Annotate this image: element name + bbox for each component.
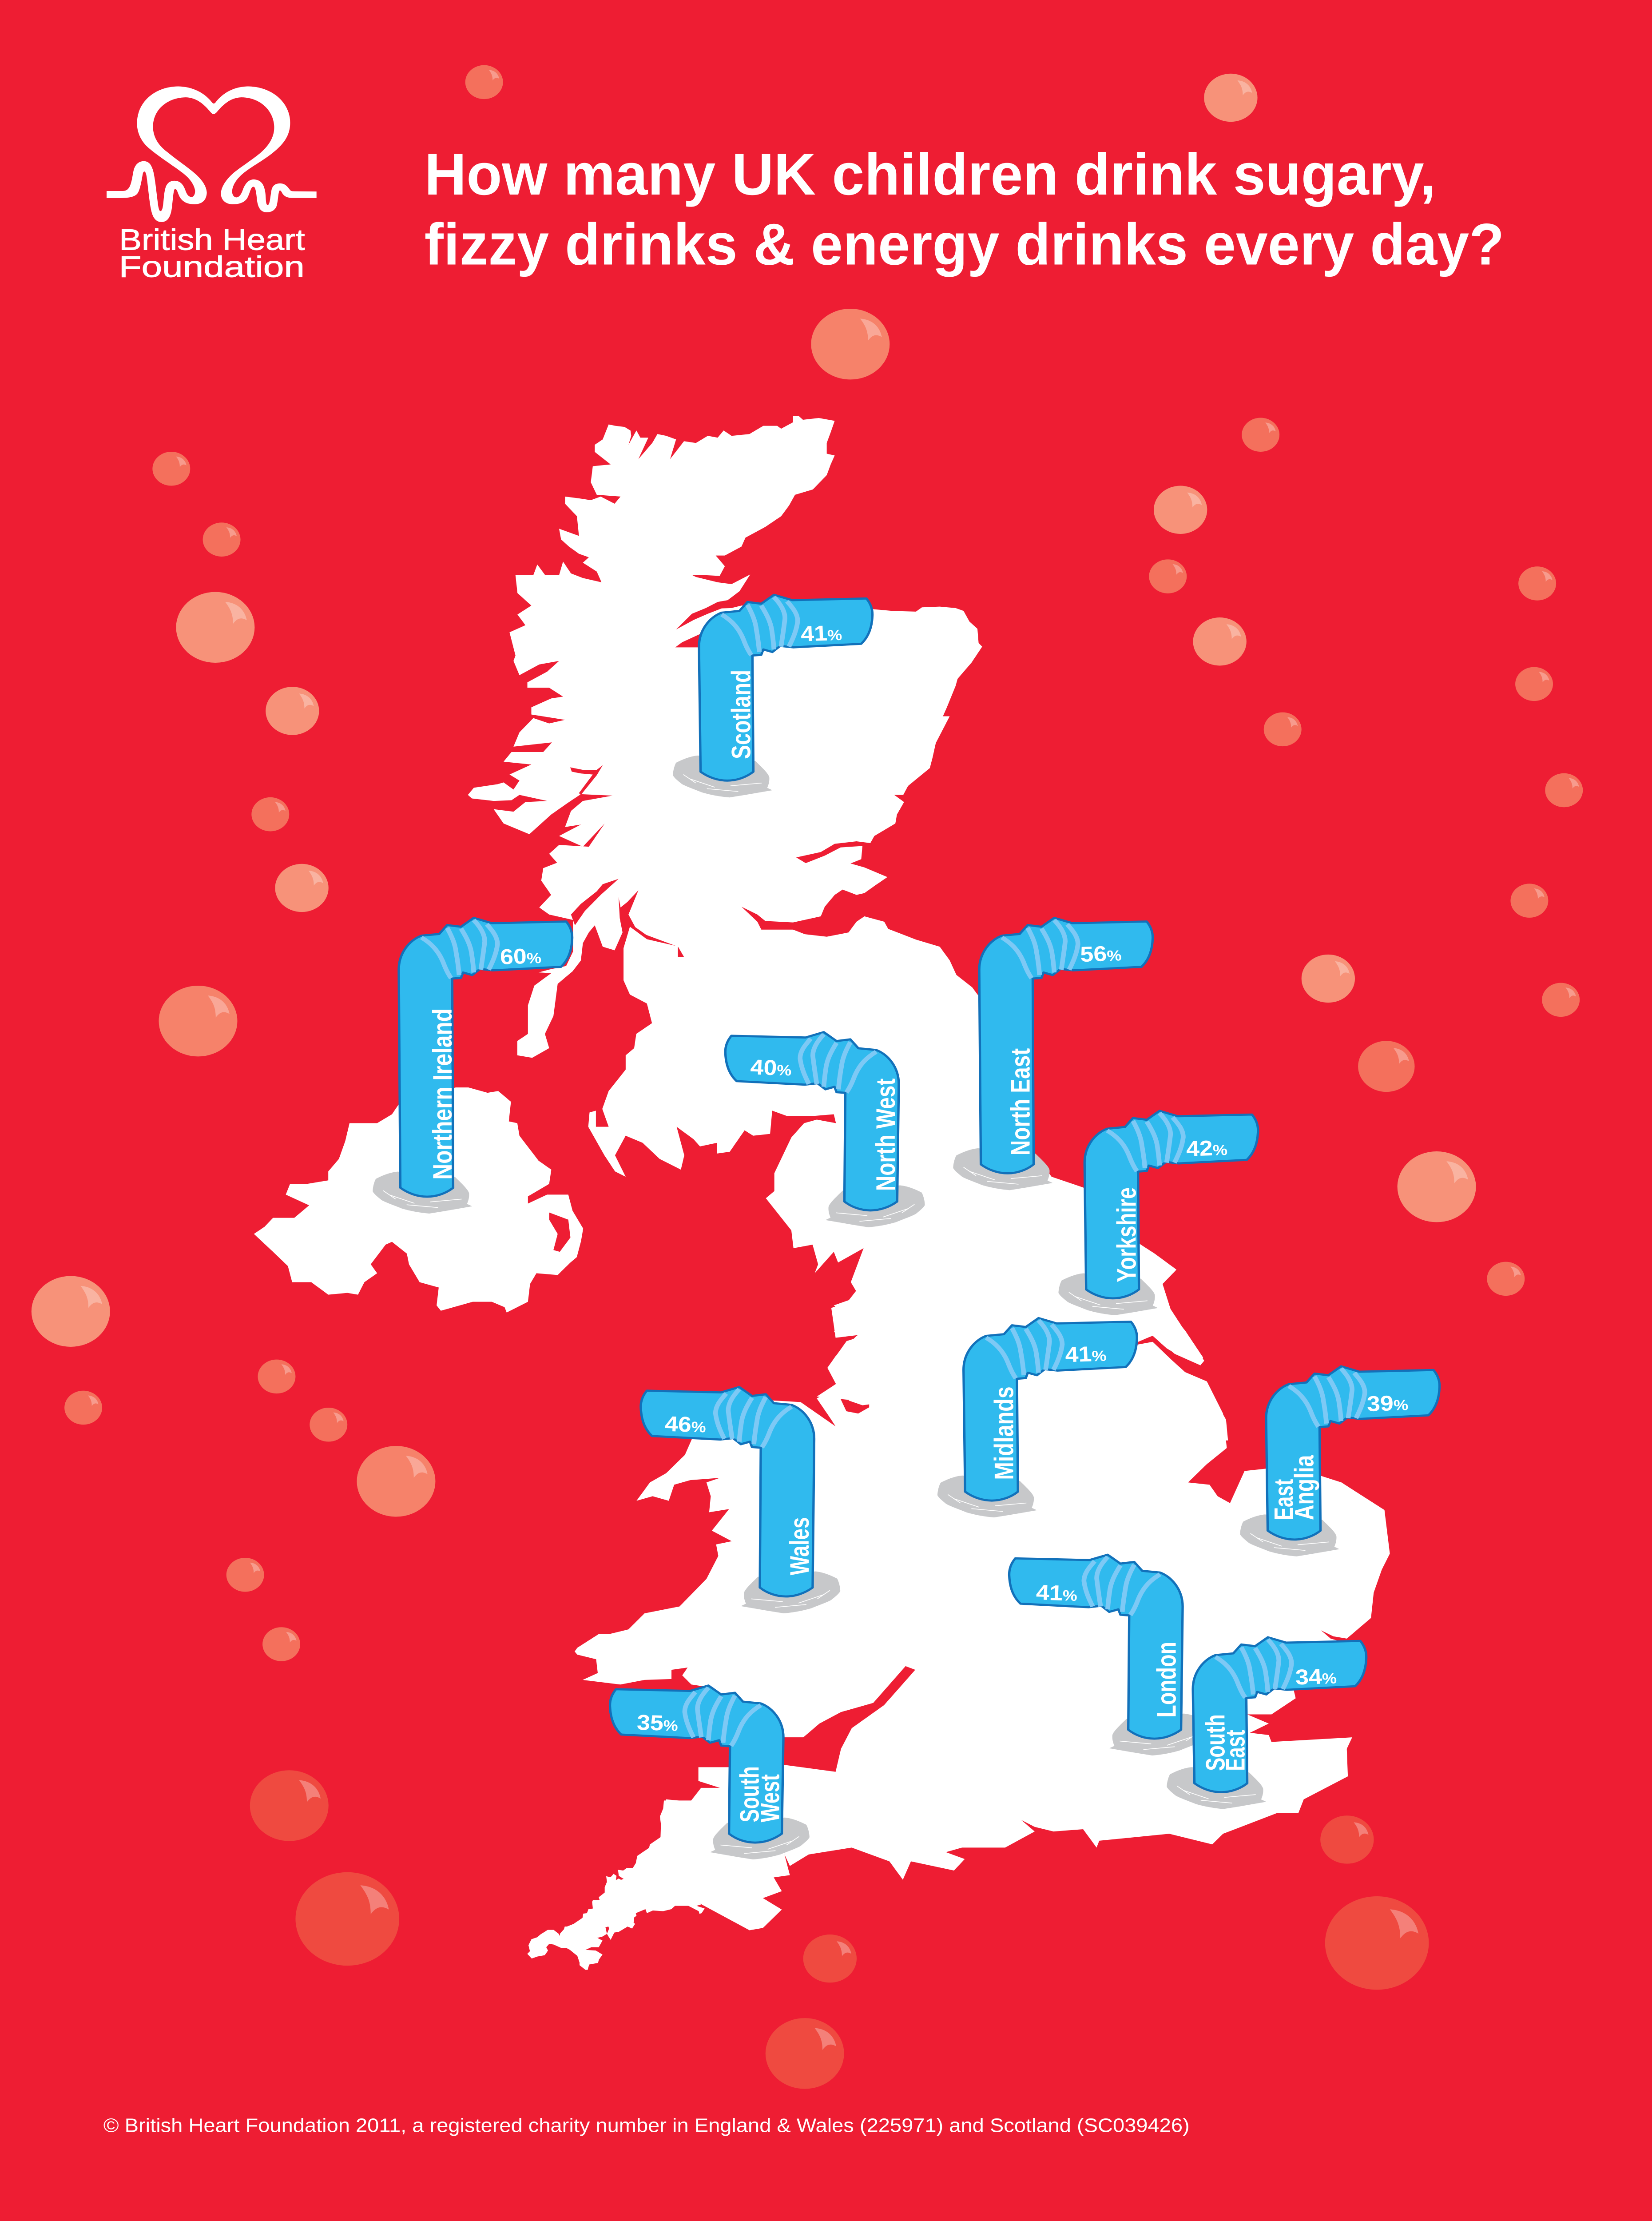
map of the UK	[254, 416, 1390, 1970]
bubble	[1154, 486, 1207, 534]
title: fizzy drinks & energy drinks every day?	[425, 211, 1504, 277]
bubble	[1487, 1262, 1525, 1296]
logo: British Heart Foundation	[107, 87, 317, 283]
bubble	[258, 1360, 295, 1393]
pipe: North East 56%: North East	[1006, 1048, 1036, 1155]
bubble	[1264, 712, 1302, 746]
pipe: Wales 46%	[641, 1387, 840, 1613]
map: Northern Ireland	[254, 1087, 583, 1313]
map: northern Scotland	[468, 416, 982, 960]
bubble	[250, 1770, 329, 1841]
footer copyright text: © British Heart Foundation 2011, a registered charity number in England & Wales (225971) and Scotland (SC039426)	[103, 2115, 1190, 2136]
icon: heart with heartbeat line	[107, 87, 317, 222]
pipe: East Anglia 39%: Anglia	[1290, 1455, 1319, 1520]
bubble	[465, 65, 503, 99]
pipe: London 41%	[1009, 1555, 1209, 1755]
bubble	[266, 687, 319, 735]
pipe: Midlands 41%	[937, 1318, 1137, 1517]
pipe: Northern Ireland 60%: 60%	[500, 943, 542, 969]
pipe: Scotland 41%: Scotland	[727, 670, 756, 759]
pipe: Midlands 41%: 41%	[1064, 1341, 1107, 1367]
bubble	[1542, 983, 1580, 1017]
pipe: Yorkshire 42%: 42%	[1186, 1135, 1228, 1161]
bubble	[64, 1391, 102, 1425]
pipe: South West 35%: West	[755, 1774, 785, 1823]
bubble	[803, 1934, 857, 1982]
title	[425, 141, 1504, 277]
pipe: Northern Ireland 60%: Northern Ireland	[428, 1008, 458, 1180]
map: Cornwall	[527, 1800, 725, 1970]
bubble	[32, 1276, 110, 1347]
pipe: London 41%: 41%	[1036, 1580, 1078, 1605]
bubble	[295, 1872, 399, 1966]
pipe: East Anglia 39%	[1240, 1366, 1440, 1556]
pipe: North East 56%	[953, 918, 1153, 1190]
pipe: North West 40%	[725, 1032, 925, 1227]
bubble	[1510, 884, 1548, 918]
pipe: South West 35%: South	[735, 1766, 765, 1823]
pipe: Scotland 41%	[673, 595, 873, 797]
pipe: South East 34%: South	[1201, 1714, 1231, 1771]
bubble	[226, 1558, 264, 1592]
pipe: North West 40%: 40%	[750, 1055, 792, 1080]
pipe: Scotland 41%: 41%	[800, 621, 842, 646]
bubble	[766, 2018, 844, 2089]
bubble	[1193, 617, 1247, 665]
bubble	[1149, 559, 1187, 593]
bubble	[1320, 1815, 1374, 1864]
bubble	[1545, 773, 1583, 807]
bubble	[152, 452, 190, 486]
bubble	[1242, 418, 1279, 452]
bubble	[159, 986, 237, 1056]
bubble	[357, 1446, 435, 1517]
bubble	[262, 1627, 300, 1661]
logo text	[119, 223, 305, 283]
bubble	[176, 592, 254, 663]
logo text: Foundation	[119, 250, 305, 283]
pipe: North West 40%: North West	[871, 1079, 901, 1191]
pipe: Yorkshire 42%: Yorkshire	[1112, 1187, 1142, 1282]
bubble	[251, 797, 289, 831]
pipe: South West 35%	[610, 1686, 810, 1859]
bubble	[1358, 1041, 1415, 1092]
bubble	[275, 864, 329, 912]
bubble	[1518, 566, 1556, 601]
map: England and Wales	[575, 1280, 1390, 1930]
pipe: South East 34%: 34%	[1295, 1664, 1337, 1689]
map: south-west Scotland, Cumbria and Lancashire	[517, 927, 936, 1409]
pipe: East Anglia 39%: 39%	[1366, 1391, 1409, 1416]
bubble	[203, 522, 241, 557]
pipe: South East 34%	[1167, 1637, 1366, 1809]
pipe: Wales 46%: Wales	[785, 1517, 815, 1575]
pipe: Wales 46%: 46%	[664, 1412, 707, 1437]
pipe: Northern Ireland 60%	[373, 918, 572, 1214]
bubble	[310, 1408, 347, 1442]
pipe: South East 34%: East	[1221, 1730, 1251, 1771]
logo text: British Heart	[119, 223, 305, 256]
bubble	[1204, 74, 1258, 122]
pipe: London 41%: London	[1152, 1642, 1182, 1718]
bubble	[1515, 667, 1553, 701]
bubble	[1302, 955, 1355, 1003]
bubble	[811, 309, 890, 379]
title: How many UK children drink sugary,	[425, 141, 1436, 207]
pipe: Midlands 41%: Midlands	[989, 1386, 1019, 1480]
pipe: Yorkshire 42%	[1058, 1111, 1258, 1315]
map: north-east England	[869, 957, 1228, 1441]
bubble	[1398, 1151, 1476, 1222]
pipe: South West 35%: 35%	[636, 1710, 679, 1735]
pipe: North East 56%: 56%	[1080, 941, 1122, 966]
bubble	[1325, 1896, 1429, 1990]
pipe: East Anglia 39%: East	[1269, 1479, 1299, 1520]
